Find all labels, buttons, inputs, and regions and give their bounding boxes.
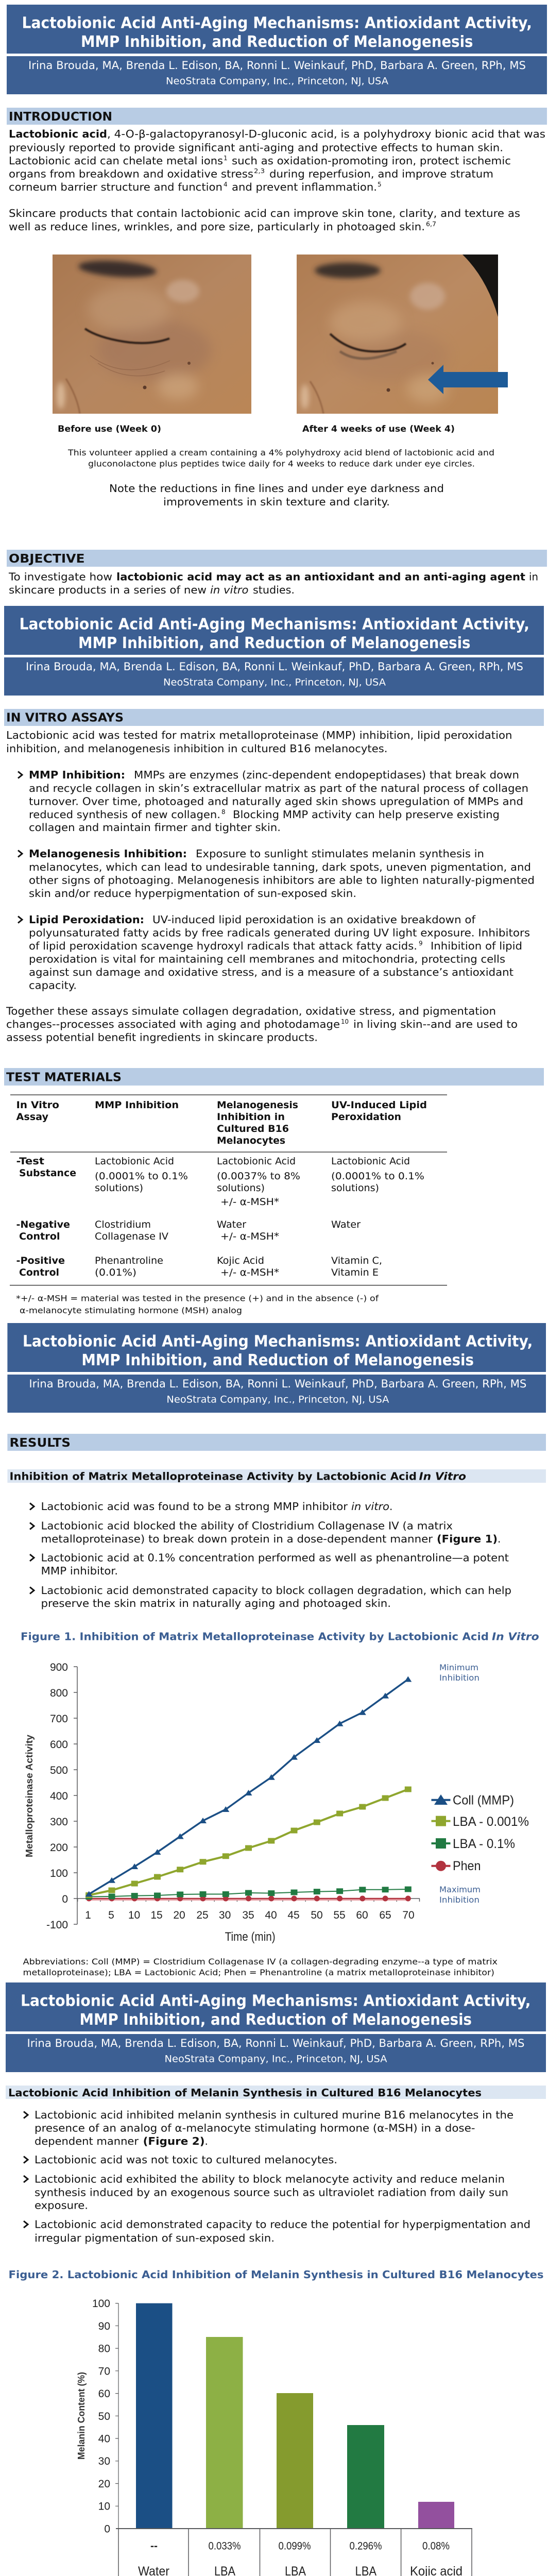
- MMP result bullets: .: [498, 1533, 501, 1545]
- authors repeat: Irina Brouda, MA, Brenda L. Edison, BA, Ronni L. Weinkauf, PhD, Barbara A. Green, RPh, MS: [26, 660, 523, 673]
- panel: melanin synthesis inhibition: [6, 2086, 546, 2576]
- introduction text: organs from breakdown and oxidative stress: [9, 168, 253, 180]
- introduction text: such as oxidation-promoting iron, protect ischemic: [232, 155, 511, 167]
- y axis: [76, 2298, 118, 2535]
- x axis: 35: [242, 1909, 254, 1921]
- panel: test materials: [4, 1068, 544, 1315]
- objective text: To investigate how: [8, 571, 112, 583]
- table: test materials: (0.0001% to 0.1%: [95, 1171, 188, 1182]
- subheading: MMP inhibition: Inhibition of Matrix Metalloproteinase Activity by Lactobionic Acid: [9, 1470, 417, 1483]
- x axis: 55: [333, 1909, 346, 1921]
- bar chart: melanin content: [76, 2298, 472, 2576]
- x axis: 25: [196, 1909, 209, 1921]
- table: test materials: (0.0037% to 8%: [217, 1171, 300, 1182]
- melanin result bullets: irregular pigmentation of sun-exposed skin.: [35, 2232, 275, 2244]
- table: test materials: -Positive: [16, 1255, 65, 1266]
- section heading: results: [7, 1434, 546, 1451]
- title repeat: MMP Inhibition, and Reduction of Melanogenesis: [78, 634, 471, 652]
- bullet: melanogenesis inhibition: melanocytes, which can lead to undesirable tanning, dark spots, uneven pigmentation, and: [29, 861, 531, 873]
- assays closing text: Together these assays simulate collagen degradation, oxidative stress, and pigmentation: [6, 1005, 496, 1017]
- introduction text: Lactobionic acid can chelate metal ions: [9, 155, 223, 167]
- y axis: 30: [98, 2455, 110, 2467]
- objective text: studies.: [253, 584, 295, 596]
- panel: in vitro assays: [4, 709, 544, 1043]
- title banner 4: [6, 1982, 546, 2072]
- line chart: MMP activity over time: [24, 1662, 529, 1944]
- section heading: introduction: [7, 108, 547, 125]
- section heading: objective: OBJECTIVE: [9, 552, 84, 566]
- x axis: [77, 1899, 420, 1944]
- x axis: 15: [150, 1909, 163, 1921]
- bullet: MMP inhibition: MMP Inhibition:: [29, 769, 125, 781]
- introduction text: 1: [224, 155, 228, 162]
- x axis: 45: [287, 1909, 300, 1921]
- section heading: in vitro assays: [4, 709, 544, 726]
- assays closing text: assess potential benefit ingredients in skincare products.: [6, 1031, 318, 1043]
- introduction text: during reperfusion, and improve stratum: [269, 168, 493, 180]
- table: test materials: Control: [19, 1267, 59, 1278]
- y axis: 40: [98, 2433, 110, 2445]
- melanin result bullets: exposure.: [35, 2199, 88, 2212]
- MMP result bullets: Lactobionic acid at 0.1% concentration performed as well as phenantroline—a potent: [41, 1552, 509, 1564]
- subheading: MMP inhibition: [7, 1469, 546, 1483]
- table: test materials: -Negative: [16, 1219, 70, 1230]
- table: test materials: Assay: [16, 1111, 49, 1123]
- study description: This volunteer applied a cream containing a 4% polyhydroxy acid blend of lactobionic acid and: [67, 448, 494, 457]
- x axis: 30: [219, 1909, 231, 1921]
- bullet: MMP inhibition: and recycle collagen in skin’s extracellular matrix as part of the natural process of collagen: [29, 782, 528, 794]
- MMP result bullets: Lactobionic acid blocked the ability of Clostridium Collagenase IV (a matrix: [41, 1520, 453, 1532]
- table: test materials: Collagenase IV: [95, 1231, 168, 1242]
- melanin result bullets: dependent manner: [35, 2135, 139, 2147]
- y axis: -100: [46, 1919, 68, 1931]
- y axis: 700: [50, 1713, 68, 1725]
- table: test materials: +/- α-MSH*: [220, 1267, 279, 1278]
- section heading: introduction: INTRODUCTION: [9, 110, 112, 124]
- series: LBA 0.1%: [85, 1887, 412, 1900]
- title banner 2: [4, 606, 544, 696]
- MMP result bullets: MMP inhibitor.: [41, 1565, 118, 1577]
- section heading: test materials: TEST MATERIALS: [6, 1071, 122, 1084]
- objective text: in vitro: [210, 584, 248, 596]
- table: test materials: In Vitro: [16, 1099, 59, 1111]
- bullet: lipid peroxidation: 9: [419, 940, 423, 947]
- bullet: MMP inhibition: [18, 769, 528, 834]
- y axis: 20: [98, 2478, 110, 2490]
- melanin result bullets: Lactobionic acid demonstrated capacity to reduce the potential for hyperpigmentation and: [35, 2218, 530, 2230]
- assays intro: Lactobionic acid was tested for matrix metalloproteinase (MMP) inhibition, lipid peroxidation: [6, 729, 512, 741]
- bullet: melanogenesis inhibition: Exposure to sunlight stimulates melanin synthesis in: [196, 848, 484, 860]
- y axis: 70: [98, 2365, 110, 2377]
- y axis: 0: [62, 1893, 68, 1905]
- objective text: lactobionic acid may act as an antioxidant and an anti-aging agent: [116, 571, 525, 583]
- authors: Irina Brouda, MA, Brenda L. Edison, BA, Ronni L. Weinkauf, PhD, Barbara A. Green, RPh, MS: [28, 59, 526, 72]
- x axis: 10: [128, 1909, 140, 1921]
- authors repeat: NeoStrata Company, Inc., Princeton, NJ, USA: [166, 1394, 389, 1405]
- melanin result bullets: Lactobionic acid was not toxic to cultured melanocytes.: [35, 2154, 337, 2166]
- melanin result bullets: presence of an analog of α-melanocyte stimulating hormone (α-MSH) in a dose-: [35, 2122, 475, 2134]
- photo captions: Before use (Week 0): [58, 424, 161, 434]
- x axis: 65: [379, 1909, 391, 1921]
- y axis: 900: [50, 1662, 68, 1673]
- note on results: improvements in skin texture and clarity.: [163, 496, 390, 508]
- assays closing text: 10: [341, 1018, 349, 1025]
- section heading: test materials: [4, 1068, 544, 1086]
- x axis: 50: [311, 1909, 323, 1921]
- assays closing text: in living skin--and are used to: [353, 1018, 518, 1030]
- authors repeat: NeoStrata Company, Inc., Princeton, NJ, USA: [163, 676, 386, 688]
- x axis: 20: [173, 1909, 185, 1921]
- table: test materials: Water: [217, 1219, 246, 1230]
- introduction text: [9, 128, 545, 233]
- authors repeat: NeoStrata Company, Inc., Princeton, NJ, USA: [165, 2053, 387, 2064]
- x axis categories: 0.08%: [422, 2540, 450, 2552]
- series: LBA 0.001%: [85, 1787, 412, 1898]
- table: test materials: UV-Induced Lipid: [331, 1099, 427, 1111]
- subheading: MMP inhibition: In Vitro: [419, 1470, 466, 1483]
- y axis: 10: [98, 2501, 110, 2513]
- table: test materials: solutions): [217, 1182, 265, 1194]
- table: test materials: Lactobionic Acid: [95, 1156, 174, 1167]
- assays closing text: changes--processes associated with aging and photodamage: [6, 1018, 340, 1030]
- y axis: 200: [50, 1842, 68, 1854]
- y axis: 100: [50, 1868, 68, 1879]
- bullet: lipid peroxidation: UV-induced lipid peroxidation is an oxidative breakdown of: [152, 913, 476, 926]
- bullet: MMP inhibition: 8: [221, 808, 226, 816]
- title repeat: Lactobionic Acid Anti-Aging Mechanisms: Antioxidant Activity,: [21, 1992, 530, 2010]
- melanin result bullets: Lactobionic acid exhibited the ability to block melanocyte activity and reduce melanin: [35, 2173, 505, 2185]
- table: test materials: (0.01%): [95, 1267, 136, 1278]
- y axis: 100: [92, 2298, 110, 2310]
- introduction text: Skincare products that contain lactobionic acid can improve skin tone, clarity, and texture as: [9, 207, 520, 219]
- legend: [432, 1793, 529, 1873]
- x axis categories: [116, 2529, 472, 2576]
- MMP result bullets: [30, 1500, 511, 1609]
- title repeat: Lactobionic Acid Anti-Aging Mechanisms: Antioxidant Activity,: [20, 616, 529, 634]
- table: test materials: Cultured B16: [217, 1123, 289, 1134]
- x axis: 40: [265, 1909, 277, 1921]
- authors repeat: Irina Brouda, MA, Brenda L. Edison, BA, Ronni L. Weinkauf, PhD, Barbara A. Green, RPh, MS: [29, 1378, 526, 1390]
- authors repeat: [26, 660, 523, 688]
- MMP result bullets: Lactobionic acid demonstrated capacity to block collagen degradation, which can help: [41, 1584, 511, 1597]
- subheading: melanin synthesis: Lactobionic Acid Inhibition of Melanin Synthesis in Cultured B16 Melanocytes: [8, 2087, 482, 2099]
- figure 1 abbreviations: Abbreviations: Coll (MMP) = Clostridium Collagenase IV (a collagen-degrading enzyme--a type of matrix: [23, 1957, 498, 1967]
- series: Coll MMP: [85, 1676, 412, 1897]
- bullet: melanogenesis inhibition: [18, 848, 535, 900]
- x axis: Time (min): [225, 1930, 276, 1944]
- objective text: [8, 571, 538, 596]
- x axis categories: 0.033%: [208, 2540, 241, 2552]
- section heading: objective: [7, 550, 547, 567]
- note on results: Note the reductions in fine lines and under eye darkness and: [109, 482, 444, 495]
- MMP result bullets: (Figure 1): [437, 1533, 498, 1545]
- table footnote: [16, 1293, 379, 1315]
- MMP result bullets: preserve the skin matrix in naturally aging and photoaged skin.: [41, 1597, 391, 1609]
- table: test materials: Kojic Acid: [217, 1255, 264, 1266]
- table: test materials: Inhibition in: [217, 1111, 285, 1123]
- figure 1 title: Figure 1. Inhibition of Matrix Metalloproteinase Activity by Lactobionic Acid: [21, 1631, 489, 1643]
- bullet: lipid peroxidation: peroxidation is vital for maintaining cell membranes and mitochondria, protecting cells: [29, 953, 505, 965]
- y axis: 90: [98, 2320, 110, 2332]
- annotation: maximum inhibition: Inhibition: [439, 1895, 480, 1905]
- title banner 3: [7, 1323, 546, 1413]
- title banner 1: [7, 5, 547, 94]
- bullet: melanogenesis inhibition: other signs of photoaging. Melanogenesis inhibitors are able to lighten naturally-pigmented: [29, 874, 535, 886]
- panel: introduction: [7, 108, 547, 508]
- bullet: MMP inhibition: turnover. Over time, photoaged and naturally aged skin shows upregulation of MMPs and: [29, 795, 523, 808]
- introduction text: previously reported to provide significant anti-aging and protective effects to human skin.: [9, 141, 503, 154]
- MMP result bullets: metalloproteinase) to break down protein in a dose-dependent manner: [41, 1533, 433, 1545]
- y axis: 500: [50, 1765, 68, 1776]
- bullet: lipid peroxidation: polyunsaturated fatty acids by free radicals generated during UV light exposure. Inhibitors: [29, 927, 530, 939]
- y axis: Metalloproteinase Activity: [24, 1735, 35, 1857]
- objective text: skincare products in a series of new: [9, 584, 207, 596]
- bullet: lipid peroxidation: Lipid Peroxidation:: [29, 913, 144, 926]
- x axis categories: 0.099%: [278, 2540, 311, 2552]
- table: test materials: -Test: [16, 1156, 44, 1167]
- introduction text: well as reduce lines, wrinkles, and pore size, particularly in photoaged skin.: [9, 221, 425, 233]
- bullet: lipid peroxidation: Inhibition of lipid: [431, 940, 522, 952]
- introduction text: corneum barrier structure and function: [9, 181, 222, 193]
- legend: Coll (MMP): [453, 1793, 514, 1807]
- authors: NeoStrata Company, Inc., Princeton, NJ, USA: [166, 75, 388, 87]
- x axis: 70: [402, 1909, 415, 1921]
- bullet: MMP inhibition: reduced synthesis of new collagen.: [29, 808, 220, 821]
- table footnote: α-melanocyte stimulating hormone (MSH) analog: [20, 1306, 242, 1315]
- bullet: melanogenesis inhibition: skin and/or reduce hyperpigmentation of sun-exposed skin.: [29, 887, 356, 900]
- objective text: in: [529, 571, 538, 583]
- figure 1 abbreviations: [23, 1957, 498, 1977]
- table: test materials: Lactobionic Acid: [331, 1156, 410, 1167]
- y axis: 50: [98, 2411, 110, 2422]
- x axis: 60: [356, 1909, 368, 1921]
- photo: before use: [53, 255, 251, 414]
- panel: results, MMP inhibition: [7, 1434, 546, 1977]
- annotation: minimum inhibition: Inhibition: [439, 1673, 480, 1683]
- legend: Phen: [453, 1859, 481, 1873]
- bullet: MMP inhibition: MMPs are enzymes (zinc-dependent endopeptidases) that break down: [134, 769, 519, 781]
- bullet: lipid peroxidation: capacity.: [29, 979, 77, 991]
- assays intro: inhibition, and melanogenesis inhibition in cultured B16 melanocytes.: [6, 742, 387, 755]
- title repeat: MMP Inhibition, and Reduction of Melanogenesis: [79, 2011, 472, 2029]
- series: Phen: [86, 1896, 411, 1901]
- title: [22, 14, 532, 51]
- table: test materials: [10, 1094, 447, 1285]
- x axis categories: --: [150, 2540, 158, 2552]
- y axis: [24, 1662, 77, 1931]
- bullet: MMP inhibition: Blocking MMP activity can help preserve existing: [233, 808, 500, 821]
- table: test materials: Melanocytes: [217, 1135, 285, 1146]
- melanin result bullets: synthesis induced by an exogenous source such as ultraviolet radiation from daily sun: [35, 2186, 508, 2198]
- title: MMP Inhibition, and Reduction of Melanogenesis: [81, 33, 473, 51]
- photo: after four weeks: [297, 255, 498, 414]
- introduction text: 5: [378, 181, 382, 188]
- bullet: melanogenesis inhibition: Melanogenesis Inhibition:: [29, 848, 187, 860]
- bullet: lipid peroxidation: [18, 913, 530, 991]
- photo captions: [58, 424, 455, 434]
- y axis: 300: [50, 1816, 68, 1828]
- assays intro: [6, 729, 512, 755]
- introduction text: 6,7: [426, 221, 436, 228]
- table: test materials: +/- α-MSH*: [220, 1231, 279, 1242]
- table: test materials: solutions): [331, 1182, 379, 1194]
- annotation: minimum inhibition: Minimum: [439, 1663, 478, 1672]
- y axis: 400: [50, 1790, 68, 1802]
- table: test materials: Water: [331, 1219, 361, 1230]
- y axis: 600: [50, 1739, 68, 1751]
- legend: LBA - 0.1%: [453, 1837, 515, 1851]
- MMP result bullets: .: [389, 1500, 392, 1513]
- authors repeat: [27, 2037, 524, 2064]
- photo captions: After 4 weeks of use (Week 4): [302, 424, 455, 434]
- bullet: lipid peroxidation: against sun damage and oxidative stress, and is a measure of a substance’s antioxidant: [29, 966, 513, 978]
- introduction text: and prevent inflammation.: [232, 181, 377, 193]
- bullet: MMP inhibition: collagen and maintain firmer and tighter skin.: [29, 821, 281, 834]
- table: test materials: +/- α-MSH*: [220, 1196, 279, 1208]
- y axis: 60: [98, 2388, 110, 2400]
- authors repeat: [29, 1378, 526, 1405]
- note on results: [109, 482, 444, 508]
- figure 1 title: In Vitro: [492, 1631, 539, 1643]
- table: test materials: Peroxidation: [331, 1111, 401, 1123]
- bullet: lipid peroxidation: of lipid peroxidation scavenge hydroxyl radicals that attack fatty acids.: [29, 940, 417, 952]
- title repeat: [23, 1333, 533, 1369]
- table footnote: *+/- α-MSH = material was tested in the presence (+) and in the absence (-) of: [16, 1293, 379, 1303]
- assays closing text: [6, 1005, 518, 1043]
- section heading: in vitro assays: IN VITRO ASSAYS: [6, 711, 124, 724]
- x axis categories: 0.296%: [349, 2540, 382, 2552]
- y axis: 800: [50, 1687, 68, 1699]
- x axis: 1: [85, 1909, 91, 1921]
- title repeat: [20, 616, 529, 652]
- melanin result bullets: [24, 2109, 530, 2244]
- authors: [28, 59, 526, 87]
- introduction text: , 4-O-β-galactopyranosyl-D-gluconic acid, is a polyhydroxy bionic acid that was: [107, 128, 545, 140]
- MMP result bullets: in vitro: [351, 1500, 389, 1513]
- table: test materials: Lactobionic Acid: [217, 1156, 296, 1167]
- title repeat: [21, 1992, 530, 2029]
- x axis: 5: [108, 1909, 114, 1921]
- introduction text: Lactobionic acid: [9, 128, 107, 140]
- melanin result bullets: .: [205, 2135, 208, 2147]
- table: test materials: Phenantroline: [95, 1255, 163, 1266]
- table: test materials: MMP Inhibition: [95, 1099, 179, 1111]
- bars: [136, 2303, 454, 2529]
- study description: [67, 448, 494, 468]
- table: test materials: solutions): [95, 1182, 143, 1194]
- y axis: Melanin Content (%): [76, 2372, 87, 2460]
- annotation: maximum inhibition: [439, 1885, 481, 1905]
- y axis: 0: [104, 2523, 110, 2535]
- table: test materials: Vitamin C,: [331, 1255, 382, 1266]
- introduction text: 4: [224, 181, 228, 188]
- table: test materials: Substance: [19, 1167, 76, 1179]
- panel: objective: [7, 550, 547, 596]
- table: test materials: (0.0001% to 0.1%: [331, 1171, 424, 1182]
- melanin result bullets: (Figure 2): [143, 2135, 205, 2147]
- title repeat: MMP Inhibition, and Reduction of Melanogenesis: [81, 1351, 474, 1369]
- figure 1 abbreviations: metalloproteinase); LBA = Lactobionic Acid; Phen = Phenantroline (a matrix metalloproteinase inhibitor): [23, 1968, 494, 1977]
- table: test materials: Melanogenesis: [217, 1099, 298, 1111]
- authors repeat: Irina Brouda, MA, Brenda L. Edison, BA, Ronni L. Weinkauf, PhD, Barbara A. Green, RPh, MS: [27, 2037, 524, 2049]
- introduction text: 2,3: [254, 167, 265, 175]
- study description: gluconolactone plus peptides twice daily for 4 weeks to reduce dark under eye circles.: [88, 459, 475, 468]
- annotation: maximum inhibition: Maximum: [439, 1885, 481, 1894]
- melanin result bullets: Lactobionic acid inhibited melanin synthesis in cultured murine B16 melanocytes in the: [35, 2109, 513, 2121]
- figure 2 title: Figure 2. Lactobionic Acid Inhibition of Melanin Synthesis in Cultured B16 Melanocytes: [8, 2268, 544, 2281]
- annotation: minimum inhibition: [439, 1663, 480, 1683]
- section heading: results: RESULTS: [9, 1436, 71, 1450]
- table: test materials: Clostridium: [95, 1219, 151, 1230]
- y axis: 80: [98, 2343, 110, 2354]
- arrow: pointing at improved skin: [428, 365, 508, 394]
- table: test materials: Control: [19, 1231, 60, 1242]
- legend: LBA - 0.001%: [453, 1815, 529, 1829]
- MMP result bullets: Lactobionic acid was found to be a strong MMP inhibitor: [41, 1500, 348, 1513]
- table: test materials: Vitamin E: [331, 1267, 379, 1278]
